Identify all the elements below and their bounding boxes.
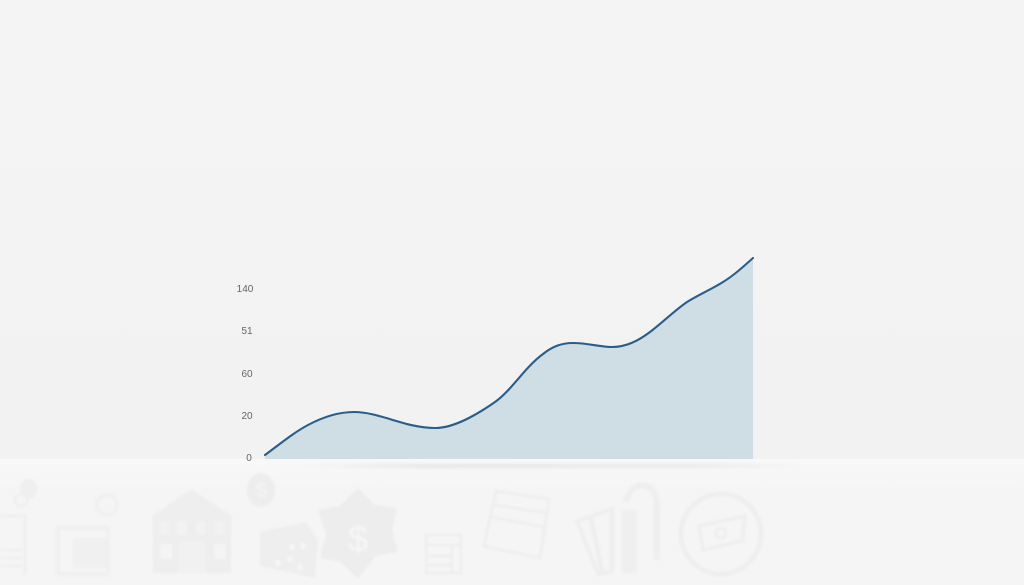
- faded icon row: [0, 473, 761, 579]
- icon: document and coin: [0, 480, 36, 575]
- icon: wallet and sun: [58, 495, 117, 574]
- icon: house: [151, 489, 234, 573]
- icon: calendar card: [484, 491, 549, 558]
- icon: dollar star badge: [318, 488, 398, 579]
- label 60: 60: [241, 369, 253, 380]
- icon: cards and hook: [577, 485, 657, 574]
- trend line: [265, 258, 753, 455]
- y axis labels: [237, 284, 254, 464]
- label 0: 0: [246, 453, 252, 464]
- area fill: [265, 258, 753, 459]
- area chart: [265, 258, 753, 459]
- label 51: 51: [241, 326, 253, 337]
- icon: stacked forms: [426, 535, 461, 573]
- icon: dice card: [260, 522, 318, 578]
- icon: dollar coin: $: [255, 480, 267, 502]
- label 140: 140: [237, 284, 254, 295]
- icon: dollar coin: [247, 473, 275, 507]
- icon: dollar star badge: $: [348, 518, 368, 559]
- floor band: [0, 459, 1024, 585]
- chart shadow: [300, 464, 810, 468]
- background wall: [0, 0, 1024, 460]
- label 20: 20: [241, 411, 253, 422]
- icon: camera in circle: [681, 494, 761, 574]
